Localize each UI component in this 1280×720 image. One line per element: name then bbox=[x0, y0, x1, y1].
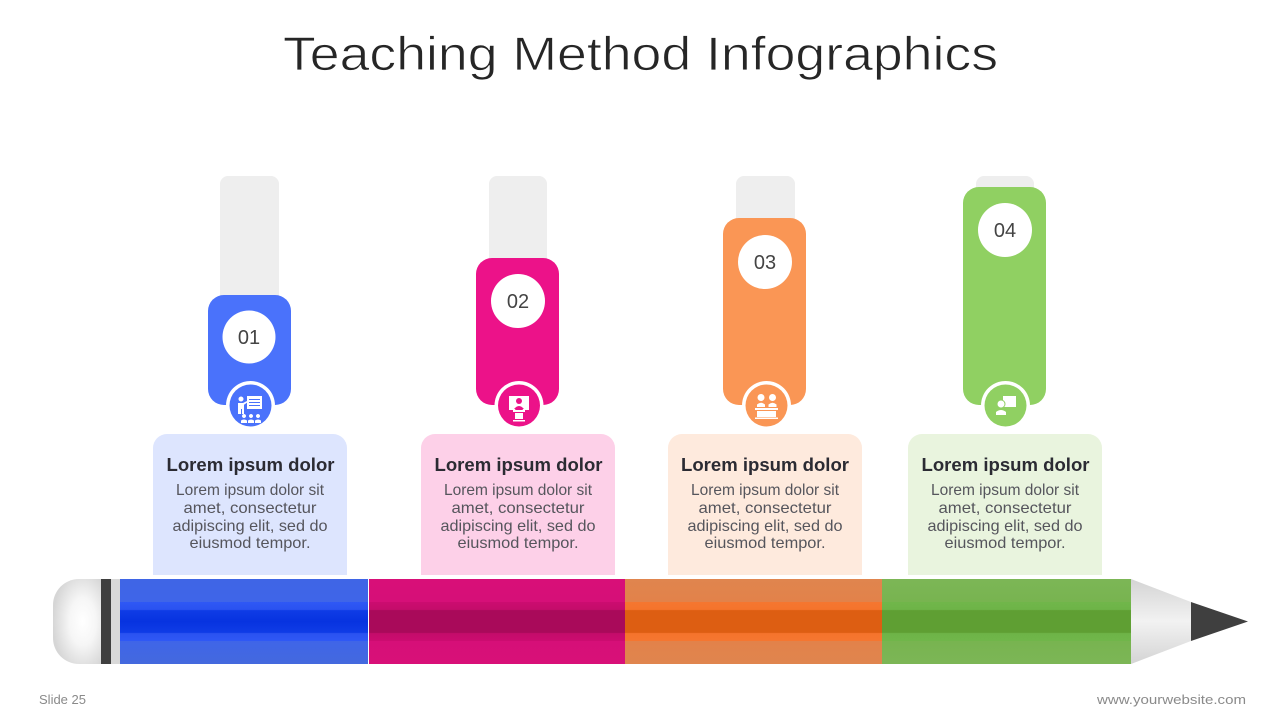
number badge 01: 01 bbox=[238, 327, 260, 349]
card 3 bbox=[668, 434, 862, 575]
card 2: adipiscing elit, sed do bbox=[440, 518, 596, 535]
card 1: amet, consectetur bbox=[184, 500, 317, 517]
icon: two people at a desk bbox=[742, 381, 791, 430]
marker panel 4 bbox=[963, 187, 1046, 405]
pencil tab 2 bbox=[489, 176, 547, 276]
number badge 02: 02 bbox=[507, 291, 529, 313]
card 2: eiusmod tempor. bbox=[458, 535, 578, 552]
card 3: adipiscing elit, sed do bbox=[688, 518, 843, 535]
card 4: adipiscing elit, sed do bbox=[928, 518, 1083, 535]
number badge 01 bbox=[222, 310, 276, 364]
column 2: podium bbox=[421, 176, 615, 575]
marker panel 2 bbox=[476, 258, 559, 405]
pencil ferrule bbox=[101, 579, 120, 664]
column 1: lecture bbox=[153, 176, 347, 575]
pencil body blue segment bbox=[120, 579, 368, 664]
pencil eraser bbox=[53, 579, 101, 664]
card 4: amet, consectetur bbox=[938, 500, 1072, 517]
card 2 bbox=[421, 434, 615, 575]
marker panel 3 bbox=[723, 218, 806, 405]
icon: teacher at presentation board bbox=[226, 381, 275, 430]
column 3: panel desk bbox=[668, 176, 862, 575]
icon: person with speech screen bbox=[981, 381, 1030, 430]
slide number: Slide 25 bbox=[39, 692, 86, 707]
pencil bbox=[53, 579, 1248, 664]
icon: speaker at podium bbox=[494, 381, 544, 430]
pencil body orange segment bbox=[625, 579, 882, 664]
card 3: eiusmod tempor. bbox=[704, 535, 826, 552]
pencil lead bbox=[1191, 602, 1248, 641]
card 1 bbox=[153, 434, 347, 575]
card 4: Lorem ipsum dolor sit bbox=[931, 482, 1080, 499]
pencil tab 1 bbox=[220, 176, 279, 306]
card 3: Lorem ipsum dolor bbox=[681, 455, 849, 475]
website: www.yourwebsite.com bbox=[1096, 692, 1246, 707]
pencil body green segment bbox=[882, 579, 1131, 664]
card 4: Lorem ipsum dolor bbox=[922, 455, 1090, 475]
title: Teaching Method Infographics bbox=[283, 28, 998, 81]
number badge 04 bbox=[978, 203, 1032, 257]
card 1: Lorem ipsum dolor sit bbox=[176, 482, 325, 499]
pencil tab 4 bbox=[976, 176, 1034, 206]
card 2: Lorem ipsum dolor bbox=[434, 455, 602, 475]
card 4 bbox=[908, 434, 1102, 575]
card 3: Lorem ipsum dolor sit bbox=[691, 482, 840, 499]
card 3: amet, consectetur bbox=[698, 500, 832, 517]
card 2: amet, consectetur bbox=[452, 500, 585, 517]
card 2: Lorem ipsum dolor sit bbox=[444, 482, 593, 499]
card 4: eiusmod tempor. bbox=[944, 535, 1066, 552]
number badge 02 bbox=[491, 274, 545, 328]
number badge 03 bbox=[738, 235, 792, 289]
pencil wood tip bbox=[1131, 579, 1191, 664]
pencil tab 3 bbox=[736, 176, 795, 236]
card 1: Lorem ipsum dolor bbox=[166, 455, 334, 475]
number badge 03: 03 bbox=[754, 252, 776, 274]
pencil body magenta segment bbox=[369, 579, 625, 664]
card 1: adipiscing elit, sed do bbox=[172, 518, 328, 535]
column 4: speaker with screen bbox=[908, 176, 1102, 575]
number badge 04: 04 bbox=[994, 220, 1016, 242]
marker panel 1 bbox=[208, 295, 291, 405]
card 1: eiusmod tempor. bbox=[190, 535, 310, 552]
